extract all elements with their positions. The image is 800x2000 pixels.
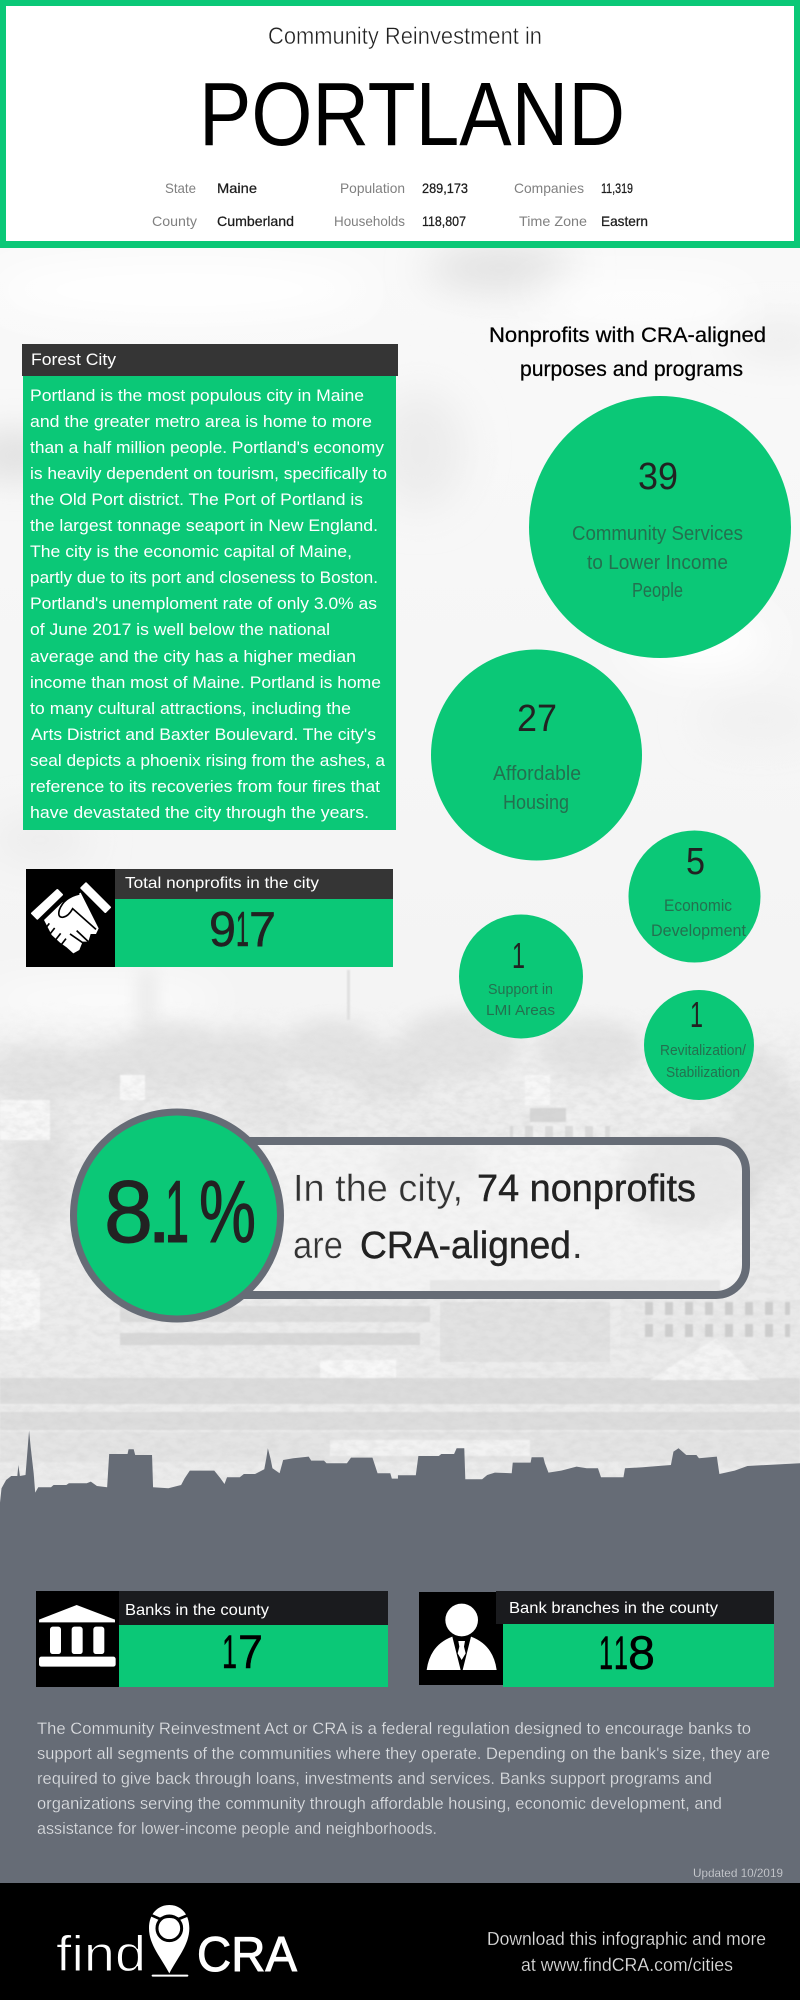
updated date: Updated 10/2019 — [693, 1866, 783, 1880]
logo: findCRA: find — [56, 1926, 146, 1982]
panel body text: have devastated the city through the years. — [30, 804, 369, 822]
card label: Bank branches in the county — [509, 1600, 718, 1617]
card value: 1 — [236, 903, 249, 957]
panel body text: income than most of Maine. Portland is home — [30, 674, 381, 692]
bubble: affordable housing: Housing — [503, 792, 569, 814]
heading: nonprofits with CRA-aligned purposes: purposes and programs — [520, 358, 743, 381]
bubble: economic development: 5 — [686, 841, 705, 883]
percentage: . — [147, 1162, 171, 1261]
bubble: support in LMI areas — [459, 914, 583, 1038]
bubble: revitalization: 1 — [690, 994, 703, 1035]
bubble: community services: Community Services — [572, 523, 743, 545]
city facts: Maine — [217, 180, 257, 196]
skyline silhouette — [0, 1431, 800, 1890]
icon: person in suit — [427, 1604, 497, 1670]
bubble: revitalization — [644, 990, 754, 1100]
footer — [0, 1883, 800, 2000]
panel body text: is heavily dependent on tourism, specifically to — [30, 465, 387, 483]
card label: Banks in the county — [125, 1602, 269, 1619]
card value: 1 — [222, 1625, 237, 1678]
heading: nonprofits with CRA-aligned purposes: Nonprofits with CRA-aligned — [489, 324, 766, 347]
panel body text: of June 2017 is well below the national — [30, 621, 330, 639]
text block: about the CRA: required to give back through loans, investments and services. Banks support programs and — [37, 1770, 712, 1788]
panel body text: Portland is the most populous city in Maine — [30, 387, 364, 405]
bubble: support in LMI areas: LMI Areas — [486, 1002, 555, 1019]
bubble: community services: 39 — [638, 456, 678, 498]
panel body text: Arts District and Baxter Boulevard. The city's — [31, 726, 376, 744]
title: PORTLAND — [199, 65, 625, 165]
text block: about the CRA: The Community Reinvestment Act or CRA is a federal regulation designed to encourage banks to — [37, 1720, 751, 1738]
panel body text: the largest tonnage seaport in New England. — [30, 517, 378, 535]
background: grayscale city photo — [0, 240, 800, 1560]
panel body text: average and the city has a higher median — [30, 648, 356, 666]
city facts: State — [165, 180, 196, 196]
card value — [209, 903, 276, 957]
bubble: revitalization: Stabilization — [666, 1064, 740, 1081]
panel body text: The city is the economic capital of Maine, — [30, 543, 352, 561]
panel body text: and the greater metro area is home to more — [30, 413, 372, 431]
subtitle: Community Reinvestment in — [268, 23, 542, 50]
city facts — [152, 180, 648, 229]
callout sentence: . — [572, 1225, 583, 1267]
download note: at www.findCRA.com/cities — [521, 1955, 733, 1975]
city facts: Households — [334, 213, 405, 229]
percentage: 8 — [104, 1162, 153, 1261]
city facts: 11,319 — [601, 180, 633, 196]
panel body text: to many cultural attractions, including the — [30, 700, 351, 718]
stat card: bank branches in the county — [419, 1591, 774, 1687]
stat card: banks in the county — [36, 1591, 388, 1687]
bubble: affordable housing: Affordable — [493, 763, 581, 785]
card value: 1 — [599, 1626, 613, 1679]
bubble: economic development — [628, 830, 760, 962]
card value: 1 — [614, 1626, 628, 1679]
card value: 7 — [249, 903, 276, 957]
bubble: support in LMI areas: 1 — [512, 935, 525, 976]
percentage — [104, 1162, 256, 1261]
percentage: 1 — [165, 1162, 189, 1261]
panel heading: Forest City — [31, 350, 117, 369]
icon: location pin — [149, 1905, 190, 1977]
panel body text: than a half million people. Portland's economy — [30, 439, 385, 457]
city facts: Eastern — [601, 213, 648, 229]
bubble: affordable housing: 27 — [517, 698, 557, 740]
logo: findCRA — [56, 1905, 297, 1982]
city facts: County — [152, 213, 197, 229]
header panel — [0, 3, 800, 248]
card value: 7 — [238, 1625, 263, 1678]
text block: about the CRA: support all segments of the communities where they operate. Depending on the bank's size, they are — [37, 1745, 770, 1763]
panel body text: partly due to its port and closeness to Boston. — [30, 569, 378, 587]
text block: about the CRA — [37, 1720, 770, 1838]
download note: Download this infographic and more — [487, 1929, 766, 1949]
card value: 9 — [209, 903, 236, 957]
bubble: economic development: Economic — [664, 896, 732, 915]
panel body text — [30, 387, 387, 822]
city facts: Companies — [514, 180, 584, 196]
bubble: community services: People — [632, 580, 683, 602]
logo: findCRA: CRA — [197, 1928, 297, 1982]
text block: about the CRA: assistance for lower-income people and neighborhoods. — [37, 1820, 437, 1838]
bubble: economic development: Development — [651, 921, 746, 940]
bubble: community services: to Lower Income — [587, 552, 728, 574]
bubble: community services — [529, 396, 791, 658]
callout sentence: are — [293, 1225, 343, 1267]
panel body text: reference to its recoveries from four fires that — [30, 778, 380, 796]
card value — [599, 1626, 655, 1679]
callout sentence: CRA-aligned — [360, 1225, 571, 1267]
panel body text: the Old Port district. The Port of Portland is — [30, 491, 363, 509]
percentage: % — [199, 1162, 256, 1261]
callout: share of CRA-aligned nonprofits — [74, 1112, 746, 1319]
stat card: total nonprofits — [26, 869, 393, 967]
heading: nonprofits with CRA-aligned purposes — [489, 324, 766, 381]
callout sentence — [293, 1168, 696, 1267]
icon: bank — [39, 1605, 116, 1667]
city facts: Cumberland — [217, 213, 294, 229]
icon: handshake — [32, 883, 110, 953]
download note — [487, 1929, 766, 1975]
card value: 8 — [628, 1626, 655, 1679]
text block: about the CRA: organizations serving the community through affordable housing, economic development, and — [37, 1795, 722, 1813]
bubble: affordable housing — [431, 650, 642, 860]
panel body text: seal depicts a phoenix rising from the ashes, a — [30, 752, 386, 770]
city facts: 118,807 — [422, 213, 466, 229]
card value — [222, 1625, 263, 1678]
bubble: revitalization: Revitalization/ — [660, 1042, 747, 1059]
card label: Total nonprofits in the city — [125, 875, 319, 892]
city facts: Population — [340, 180, 405, 196]
bubble: support in LMI areas: Support in — [488, 981, 553, 998]
panel: Forest City — [22, 344, 398, 830]
panel body text: Portland's unemploment rate of only 3.0% as — [30, 595, 377, 613]
city facts: Time Zone — [519, 213, 587, 229]
city facts: 289,173 — [422, 180, 468, 196]
callout sentence: 74 nonprofits — [477, 1168, 696, 1210]
callout sentence: In the city, — [293, 1168, 463, 1210]
